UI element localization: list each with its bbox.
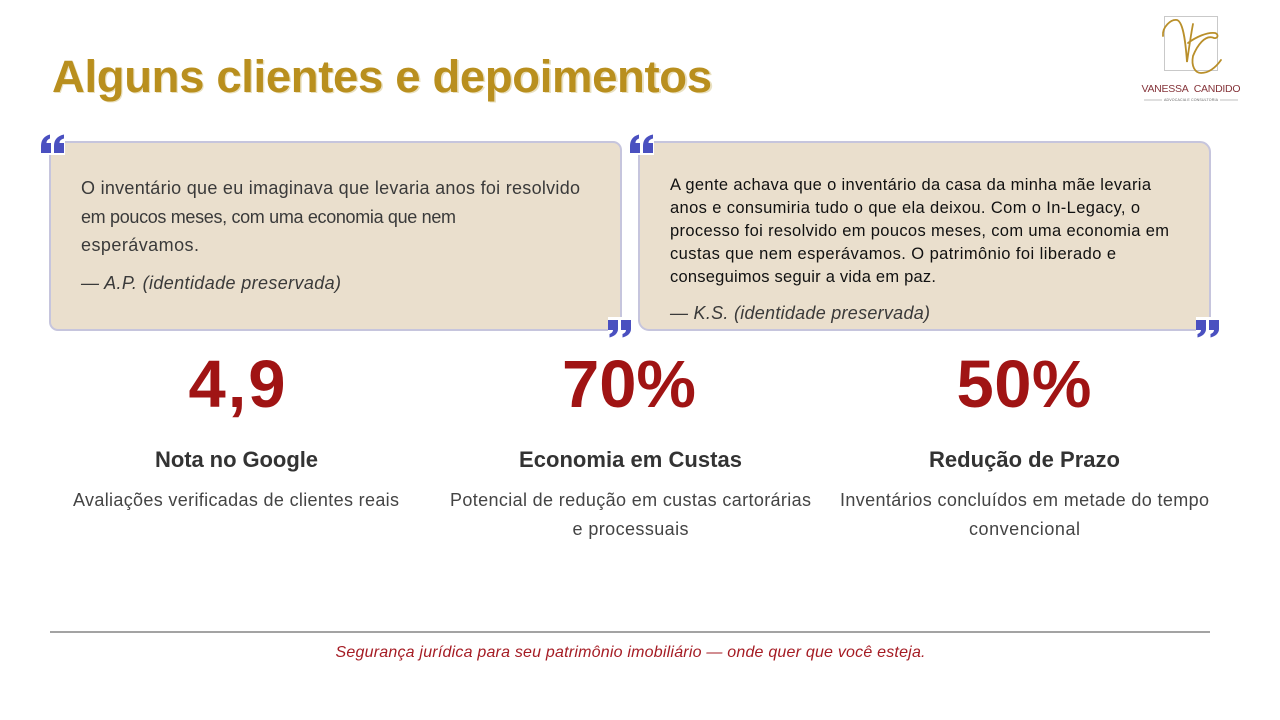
- stat description: e processuais: [572, 519, 688, 539]
- testimonial text A.P.: em poucos meses, com uma economia que nem: [81, 207, 456, 227]
- testimonial text A.P.: esperávamos.: [81, 235, 199, 255]
- title: Alguns clientes e depoimentos: [53, 52, 714, 103]
- stat heading: Redução de Prazo: [929, 447, 1120, 472]
- logo: Vanessa Candido: VANESSA CANDIDO: [1142, 83, 1240, 95]
- stat: Redução de Prazo: [840, 347, 1209, 539]
- panel: testimonial K.S.: [639, 142, 1210, 330]
- stat value 4,9: 4,9: [188, 347, 286, 422]
- logo: Vanessa Candido: ADVOCACIA E CONSULTORIA: [1164, 98, 1219, 102]
- attribution A.P.: — A.P. (identidade preservada): [80, 273, 341, 293]
- footer tagline: Segurança jurídica para seu patrimônio imobiliário — onde quer que você esteja.: [336, 644, 926, 661]
- testimonial text K.S.: anos e consumiria tudo o que ela deixou. Com o In-Legacy, o: [670, 199, 1140, 217]
- panel: testimonial A.P.: [50, 142, 621, 330]
- attribution K.S.: — K.S. (identidade preservada): [669, 303, 930, 323]
- logo: Vanessa Candido: [1142, 16, 1240, 102]
- stat description: [840, 490, 1209, 539]
- testimonial text A.P.: O inventário que eu imaginava que levaria anos foi resolvido: [81, 178, 580, 198]
- icon: opening quote left: [39, 132, 65, 155]
- testimonial text K.S.: A gente achava que o inventário da casa da minha mãe levaria: [670, 176, 1152, 194]
- testimonial text A.P.: [81, 178, 580, 255]
- stat heading: Economia em Custas: [519, 447, 742, 472]
- testimonial text K.S.: custas que nem esperávamos. O patrimônio foi liberado e: [670, 245, 1116, 263]
- stat description: Inventários concluídos em metade do tempo: [840, 490, 1209, 510]
- stat: Economia em Custas: [450, 347, 811, 539]
- stat value 70%: 70%: [562, 347, 696, 422]
- icon: closing quote left: [608, 317, 633, 339]
- stat value 50%: 50%: [956, 347, 1092, 422]
- testimonial text K.S.: processo foi resolvido em poucos meses, com uma economia em: [670, 222, 1169, 240]
- testimonial text K.S.: conseguimos seguir a vida em paz.: [670, 268, 936, 286]
- stat heading: Nota no Google: [155, 447, 318, 472]
- stat description: convencional: [969, 519, 1080, 539]
- testimonial text K.S.: [670, 176, 1169, 286]
- stat description: [450, 490, 811, 539]
- icon: closing quote right: [1196, 317, 1221, 339]
- stat description: Avaliações verificadas de clientes reais: [73, 490, 399, 510]
- icon: opening quote right: [628, 132, 654, 155]
- stat: Nota no Google: [73, 347, 399, 510]
- stat description: Potencial de redução em custas cartorárias: [450, 490, 811, 510]
- title: Alguns clientes e depoimentos: [52, 51, 712, 102]
